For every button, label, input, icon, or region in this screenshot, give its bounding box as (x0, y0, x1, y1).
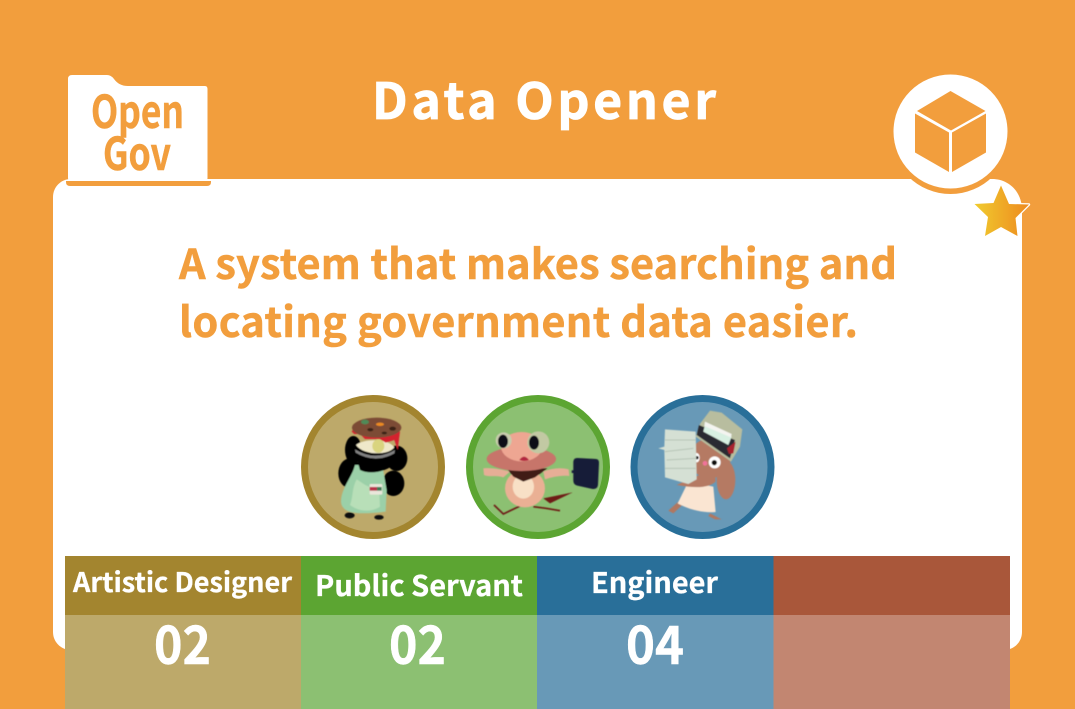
avatar: engineer character (634, 398, 771, 536)
title: Data Opener (372, 62, 716, 134)
folder badge: Open Gov: Gov (103, 118, 171, 183)
role table: Engineer: 04 (626, 604, 684, 680)
headline: locating government data easier. (179, 289, 858, 349)
role table: Engineer: Engineer (591, 561, 719, 602)
icon: cube badge (890, 74, 1010, 194)
role table: Engineer (537, 556, 774, 709)
folder badge: Open Gov: Open (91, 76, 184, 141)
headline: A system that makes searching and (178, 231, 897, 291)
role table: Artistic Designer: 02 (154, 604, 211, 680)
folder badge: Open Gov (66, 75, 211, 186)
role table: empty fourth column (774, 556, 1010, 709)
icon: star (974, 186, 1029, 236)
role table: Artistic Designer (65, 556, 301, 709)
role table: Public Servant: 02 (389, 604, 446, 680)
panel: main white card (53, 179, 1022, 650)
avatar: artistic designer character (304, 398, 442, 536)
role table: Public Servant: Public Servant (315, 564, 523, 605)
role table: Public Servant (301, 556, 537, 709)
avatar: public servant character (470, 398, 606, 536)
headline (178, 231, 897, 349)
role table: Artistic Designer: Artistic Designer (72, 561, 292, 600)
